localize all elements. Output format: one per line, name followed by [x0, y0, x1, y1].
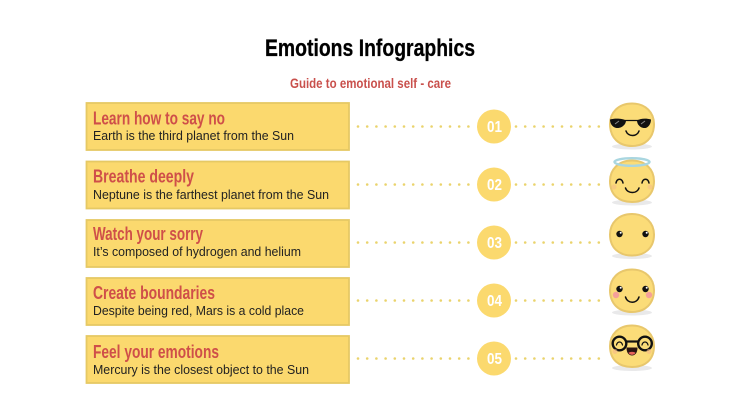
- panel: feel your emotions: Mercury is the closest object to the Sun: [93, 363, 309, 377]
- number 01: 01: [487, 119, 502, 136]
- number 01: [477, 110, 511, 144]
- connector 3 right: [516, 241, 600, 244]
- row 1: [86, 103, 654, 150]
- icon: sunglasses face: [610, 104, 654, 150]
- row 4: [86, 270, 654, 325]
- number 05: 05: [487, 351, 502, 368]
- number 03: [477, 226, 511, 260]
- icon: halo face: [610, 158, 654, 206]
- icon: glasses face: [610, 326, 654, 371]
- icon: neutral face: [610, 214, 654, 259]
- panel: breathe deeply: Neptune is the farthest planet from the Sun: [93, 188, 329, 202]
- number 04: [477, 284, 511, 318]
- icon: blushing face: [610, 270, 654, 316]
- panel: breathe deeply: Breathe deeply: [93, 166, 194, 186]
- connector 1 left: [358, 125, 472, 128]
- panel: learn how to say no: Earth is the third planet from the Sun: [93, 129, 294, 143]
- connector 1 right: [516, 125, 600, 128]
- panel: breathe deeply: [86, 162, 349, 208]
- panel: learn how to say no: [86, 103, 349, 150]
- panel: learn how to say no: Learn how to say no: [93, 108, 225, 128]
- number 03: 03: [487, 235, 502, 252]
- panel: create boundaries: Create boundaries: [93, 283, 215, 303]
- number 05: [477, 342, 511, 376]
- panel: watch your sorry: [86, 220, 349, 267]
- connector 4 left: [358, 299, 472, 302]
- panel: feel your emotions: [86, 336, 349, 383]
- panel: feel your emotions: Feel your emotions: [93, 342, 219, 362]
- title: Emotions Infographics: [265, 35, 475, 62]
- connector 3 left: [358, 241, 472, 244]
- connector 4 right: [516, 299, 600, 302]
- number 02: 02: [487, 177, 502, 194]
- panel: watch your sorry: It’s composed of hydrogen and helium: [93, 245, 301, 259]
- subtitle: Guide to emotional self - care: [290, 75, 451, 91]
- connector 5 right: [516, 357, 600, 360]
- row 3: [86, 214, 654, 267]
- panel: create boundaries: Despite being red, Mars is a cold place: [93, 304, 304, 318]
- connector 2 left: [358, 183, 472, 186]
- panel: watch your sorry: Watch your sorry: [93, 224, 203, 244]
- row 2: [86, 158, 654, 208]
- number 04: 04: [487, 293, 502, 310]
- connector 2 right: [516, 183, 600, 186]
- connector 5 left: [358, 357, 472, 360]
- row 5: [86, 326, 654, 383]
- number 02: [477, 168, 511, 202]
- panel: create boundaries: [86, 278, 349, 325]
